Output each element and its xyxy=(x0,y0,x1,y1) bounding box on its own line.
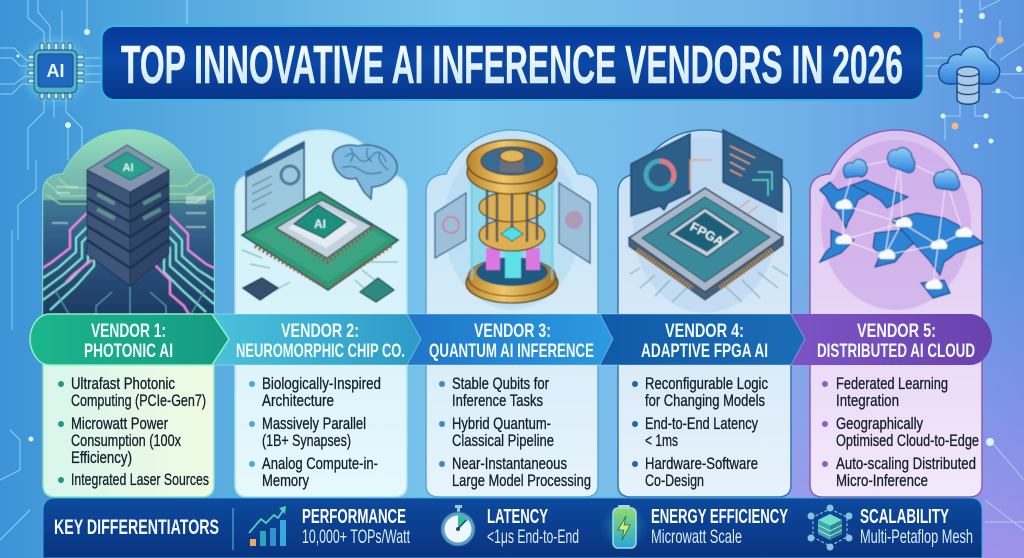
icon: AI chip xyxy=(25,41,85,101)
text block: energy efficiency: ENERGY EFFICIENCY xyxy=(651,505,788,528)
panel: vendor 2 xyxy=(235,130,407,497)
text block: vendor 2 features: (1B+ Synapses) xyxy=(262,431,351,450)
header: vendor 2: NEUROMORPHIC CHIP CO. xyxy=(236,340,405,362)
illustration: FPGA chip: FPGA xyxy=(688,219,727,249)
text block: vendor 4 features: End-to-End Latency xyxy=(645,414,758,433)
text block: vendor 1 features: Integrated Laser Sources xyxy=(71,470,209,489)
panel: vendor 4 xyxy=(618,130,791,497)
text block: vendor 3 features: Stable Qubits for xyxy=(452,374,549,393)
heading: key differentiators: KEY DIFFERENTIATORS xyxy=(54,516,219,539)
text block: vendor 5 features: Optimised Cloud-to-Edge xyxy=(836,431,979,450)
text block: vendor 1 features: Ultrafast Photonic xyxy=(71,374,175,393)
header: vendor 2: VENDOR 2: xyxy=(281,320,359,342)
icon: performance chart xyxy=(249,506,286,546)
header: vendor 1: VENDOR 1: xyxy=(91,320,166,342)
header: vendor 4: VENDOR 4: xyxy=(665,320,744,342)
text block: vendor 3 features: Inference Tasks xyxy=(452,391,543,410)
text block: vendor 5 features xyxy=(822,374,979,490)
icon: battery xyxy=(608,505,640,548)
text block: vendor 1 features xyxy=(58,374,209,489)
illustration: world map with clouds xyxy=(820,140,983,310)
text block: vendor 3 features: Hybrid Quantum- xyxy=(452,414,551,433)
panel: key differentiators bar xyxy=(43,498,982,558)
illustration: photonic server tower xyxy=(43,130,214,316)
text block: vendor 4 features xyxy=(632,374,768,490)
title banner xyxy=(102,26,924,100)
icon: stopwatch xyxy=(441,505,475,546)
icon: scalability mesh xyxy=(808,504,852,550)
text block: vendor 4 features: Co-Design xyxy=(645,471,704,490)
text block: vendor 3 features xyxy=(439,374,591,490)
icon: cloud database xyxy=(939,47,1000,104)
illustration: quantum cylinder xyxy=(435,140,590,310)
header: vendor 2 xyxy=(205,314,421,365)
text block: vendor 2 features: Memory xyxy=(262,471,309,490)
panel: vendor 1 xyxy=(43,130,214,497)
header: vendor 3: VENDOR 3: xyxy=(474,320,551,342)
header: vendor 5 xyxy=(783,314,992,365)
text block: vendor 3 features: Classical Pipeline xyxy=(452,431,554,450)
text block: vendor 4 features: for Changing Models xyxy=(645,391,765,410)
text block: vendor 3 features: Near-Instantaneous xyxy=(452,454,567,473)
text block: vendor 5 features: Geographically xyxy=(836,414,923,433)
panel: vendor 5 xyxy=(810,130,983,497)
text block: vendor 1 features: Microwatt Power xyxy=(71,414,168,433)
text block: vendor 5 features: Micro-Inference xyxy=(836,471,928,490)
header: vendor 1 xyxy=(30,314,229,365)
text block: vendor 2 features: Biologically-Inspired xyxy=(262,374,381,393)
header: vendor 1: PHOTONIC AI xyxy=(84,340,173,362)
performance value: 10,000+ TOPs/Watt xyxy=(302,526,410,548)
text block: vendor 3 features: Large Model Processing xyxy=(452,471,591,490)
text block: vendor 1 features: Consumption (100x xyxy=(71,431,181,450)
text block: vendor 2 features xyxy=(249,374,381,490)
icon: AI chip: AI xyxy=(46,61,64,81)
illustration: photonic server tower: AI xyxy=(122,162,134,174)
latency value: <1μs End-to-End xyxy=(487,526,579,548)
illustration: FPGA chip xyxy=(629,130,788,313)
text block: vendor 4 features: Reconfigurable Logic xyxy=(645,374,768,393)
text block: vendor 1 features: Computing (PCIe-Gen7) xyxy=(71,391,206,410)
text block: vendor 5 features: Federated Learning xyxy=(836,374,948,393)
illustration: neuromorphic chip and brain: AI xyxy=(314,217,326,231)
illustration: neuromorphic chip and brain xyxy=(242,142,398,302)
header: vendor 4: ADAPTIVE FPGA AI xyxy=(641,340,768,362)
text block: vendor 2 features: Architecture xyxy=(262,391,334,410)
text block: vendor 5 features: Integration xyxy=(836,391,899,410)
energy value: Microwatt Scale xyxy=(651,526,742,548)
text block: latency: LATENCY xyxy=(487,505,548,528)
text block: vendor 4 features: < 1ms xyxy=(645,431,678,450)
text block: vendor 4 features: Hardware-Software xyxy=(645,454,758,473)
header: vendor 5: VENDOR 5: xyxy=(857,320,936,342)
text block: vendor 1 features: Efficiency) xyxy=(71,448,132,467)
text block: performance: PERFORMANCE xyxy=(302,505,406,528)
text block: vendor 2 features: Analog Compute-in- xyxy=(262,454,378,473)
header: vendor 4 xyxy=(590,314,805,365)
header: vendor 3 xyxy=(398,314,613,365)
text block: scalability: SCALABILITY xyxy=(860,505,949,528)
text block: vendor 5 features: Auto-scaling Distributed xyxy=(836,454,976,473)
panel: vendor 3 xyxy=(426,130,598,497)
header: vendor 3: QUANTUM AI INFERENCE xyxy=(429,340,594,362)
text block: vendor 2 features: Massively Parallel xyxy=(262,414,366,433)
